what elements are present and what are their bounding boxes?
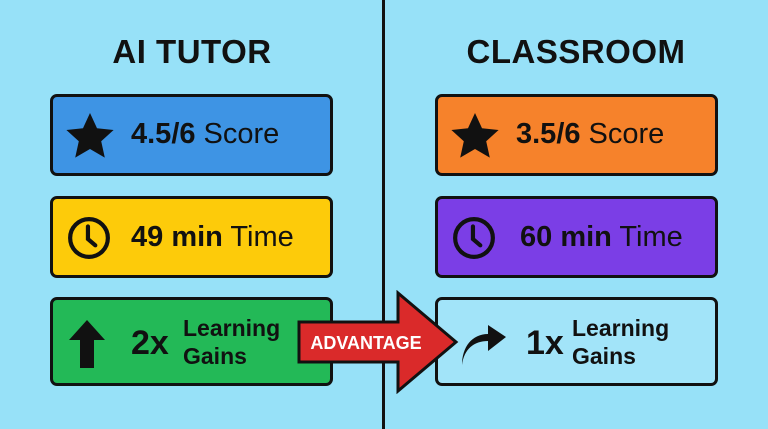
text: 1x: 1x [526, 324, 564, 362]
title: AI tutor: AI TUTOR [112, 33, 272, 70]
text: learning gains: Learning [183, 315, 280, 341]
icon: up arrow [69, 320, 105, 368]
panel: AI score [50, 94, 333, 176]
text: learning gains: Learning [572, 315, 669, 341]
text: learning gains [572, 315, 669, 369]
arrow: advantage [298, 290, 458, 394]
panel: class gains [435, 297, 718, 386]
text: learning gains: Gains [572, 343, 636, 369]
icon: star [452, 113, 498, 158]
icon: clock [453, 217, 495, 259]
icon: star [66, 113, 114, 158]
text: 4.5/6 score: 4.5/6 Score [131, 118, 279, 150]
text: 49 min time: 49 min Time [131, 221, 294, 253]
icon: clock [68, 217, 110, 259]
panel: AI gains [50, 297, 333, 386]
panel: class score [435, 94, 718, 176]
text: learning gains [183, 315, 280, 369]
text: 60 min time: 60 min Time [520, 221, 683, 253]
title: classroom: CLASSROOM [466, 33, 686, 70]
divider [382, 0, 385, 429]
arrow: advantage: ADVANTAGE [310, 333, 422, 353]
icon: curved arrow [462, 325, 506, 365]
panel: class time [435, 196, 718, 278]
text: learning gains: Gains [183, 343, 247, 369]
panel: AI time [50, 196, 333, 278]
text: 2x: 2x [131, 324, 169, 362]
text: 3.5/6 score: 3.5/6 Score [516, 118, 664, 150]
